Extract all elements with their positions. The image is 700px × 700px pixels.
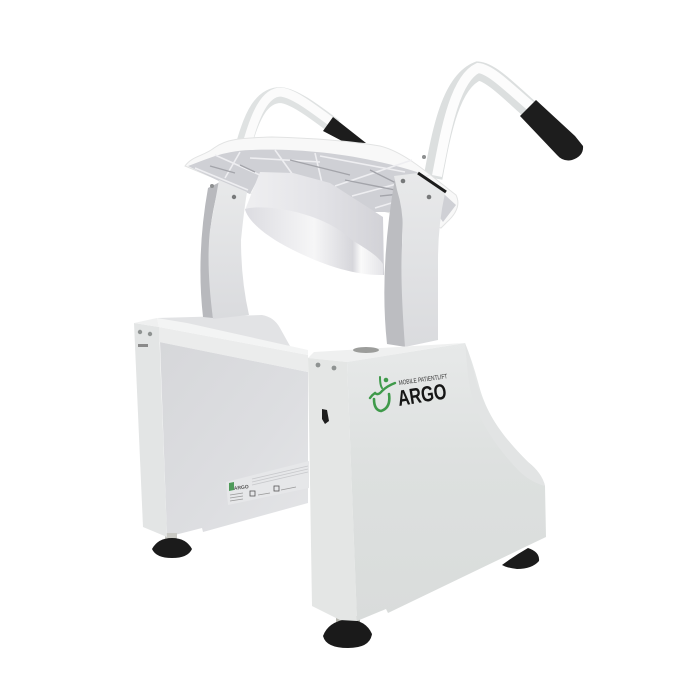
- front foot: [323, 616, 372, 648]
- left arm: [200, 180, 249, 319]
- panel curve highlight: [465, 343, 545, 486]
- left base panel front strip: [134, 318, 167, 537]
- panel top: [308, 343, 464, 362]
- logo: ARGO: [370, 373, 448, 411]
- left base panel inner face: [160, 342, 308, 537]
- left panel label: ARGO: [234, 484, 249, 492]
- panel front face: [347, 343, 546, 621]
- screws: [316, 363, 320, 367]
- seat bowl: [245, 172, 384, 275]
- right base panel: [308, 343, 546, 621]
- crossbar: [157, 318, 308, 372]
- right arm: [384, 155, 446, 347]
- right grip: [520, 100, 583, 160]
- right foot: [502, 548, 539, 569]
- icon: green figure: [370, 377, 395, 411]
- panel side strip: [308, 358, 357, 621]
- right handle: [433, 68, 583, 178]
- left handle: [243, 92, 366, 148]
- side latch: [322, 409, 329, 424]
- logo tagline: MOBILE PATIENTLIFT: [398, 373, 448, 387]
- logo wordmark: ARGO: [396, 379, 448, 411]
- seat plate: [185, 137, 458, 228]
- left panel label: [226, 461, 309, 505]
- left grip: [323, 117, 366, 143]
- back base panel top: [157, 315, 290, 346]
- left rear foot: [152, 533, 192, 558]
